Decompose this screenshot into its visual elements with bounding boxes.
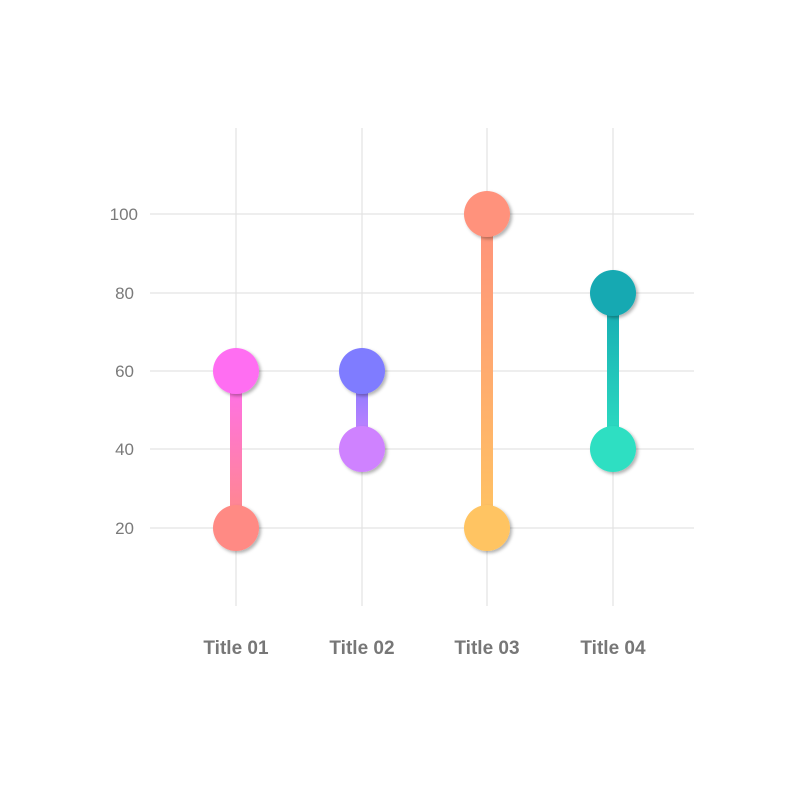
x-axis titles: Title 02 (329, 638, 395, 659)
x-axis titles: Title 01 (203, 638, 269, 659)
series: Title 03 (464, 191, 510, 551)
series: Title 01 (213, 348, 259, 551)
series: Title 04 (590, 270, 636, 472)
y-axis labels: 20 (115, 519, 134, 538)
y-axis labels: 100 (110, 205, 138, 224)
y-axis labels (110, 205, 138, 538)
y-axis labels: 40 (115, 440, 134, 459)
x-axis titles: Title 03 (454, 638, 520, 659)
y-axis labels: 80 (115, 284, 134, 303)
y-axis labels: 60 (115, 362, 134, 381)
series: Title 02 (339, 348, 385, 472)
x-axis titles: Title 04 (580, 638, 646, 659)
x-axis titles (203, 638, 646, 659)
